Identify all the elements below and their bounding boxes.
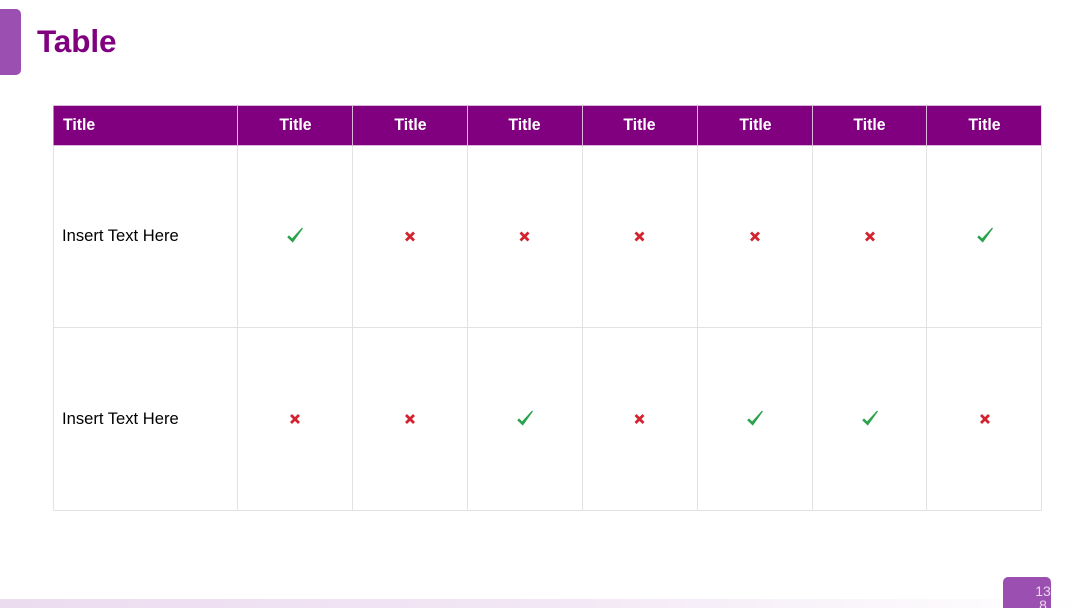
page number badge: 13	[1035, 583, 1051, 599]
header row: Title	[508, 115, 541, 134]
header row: Title	[853, 115, 886, 134]
header row: Title	[63, 115, 95, 134]
page number badge	[1003, 577, 1051, 608]
row label 2: Insert Text Here	[62, 409, 179, 428]
header row: Title	[279, 115, 312, 134]
accent tab	[0, 9, 21, 75]
header row	[63, 115, 1001, 134]
title: Table	[37, 23, 116, 59]
header row: Title	[968, 115, 1001, 134]
table grid	[53, 105, 1042, 511]
header row: Title	[739, 115, 772, 134]
header row: Title	[394, 115, 427, 134]
footer gradient bar	[0, 599, 1080, 608]
row label 1: Insert Text Here	[62, 226, 179, 245]
header row: Title	[623, 115, 656, 134]
